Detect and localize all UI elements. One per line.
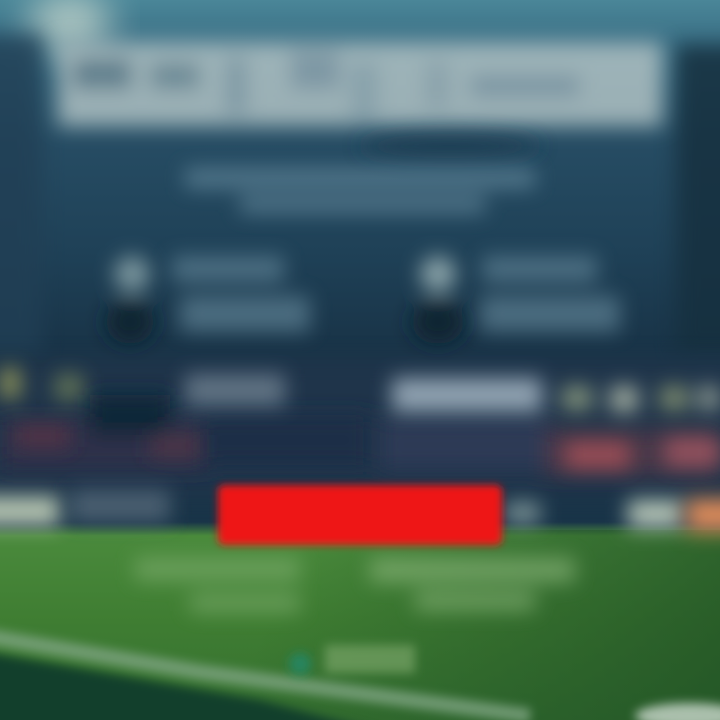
bright cloud top left [9, 0, 131, 70]
pitch sideline [0, 626, 536, 720]
pitch text block left [135, 558, 300, 612]
crowd highlights [0, 368, 720, 468]
left feature: text [172, 256, 310, 332]
bottom logo [289, 645, 415, 675]
right feature: icon [412, 256, 464, 344]
crowd band [0, 330, 720, 525]
centre and right advertising boards [70, 490, 683, 528]
bottom right highlight [630, 696, 720, 720]
orange advertising board [674, 482, 720, 548]
title band [58, 42, 662, 126]
subtitle text block [185, 168, 535, 213]
left feature: icon [106, 256, 154, 344]
pitch text block right [370, 558, 575, 610]
dark stadium tower left [0, 24, 52, 345]
pitch [0, 522, 720, 720]
dark stadium tower right [668, 34, 720, 340]
crowd shading [0, 395, 720, 475]
dark shadow under title [360, 134, 540, 158]
right feature: text [480, 256, 620, 332]
red button [218, 485, 502, 545]
dark bottom foreground [0, 650, 350, 720]
left advertising board [0, 480, 73, 540]
